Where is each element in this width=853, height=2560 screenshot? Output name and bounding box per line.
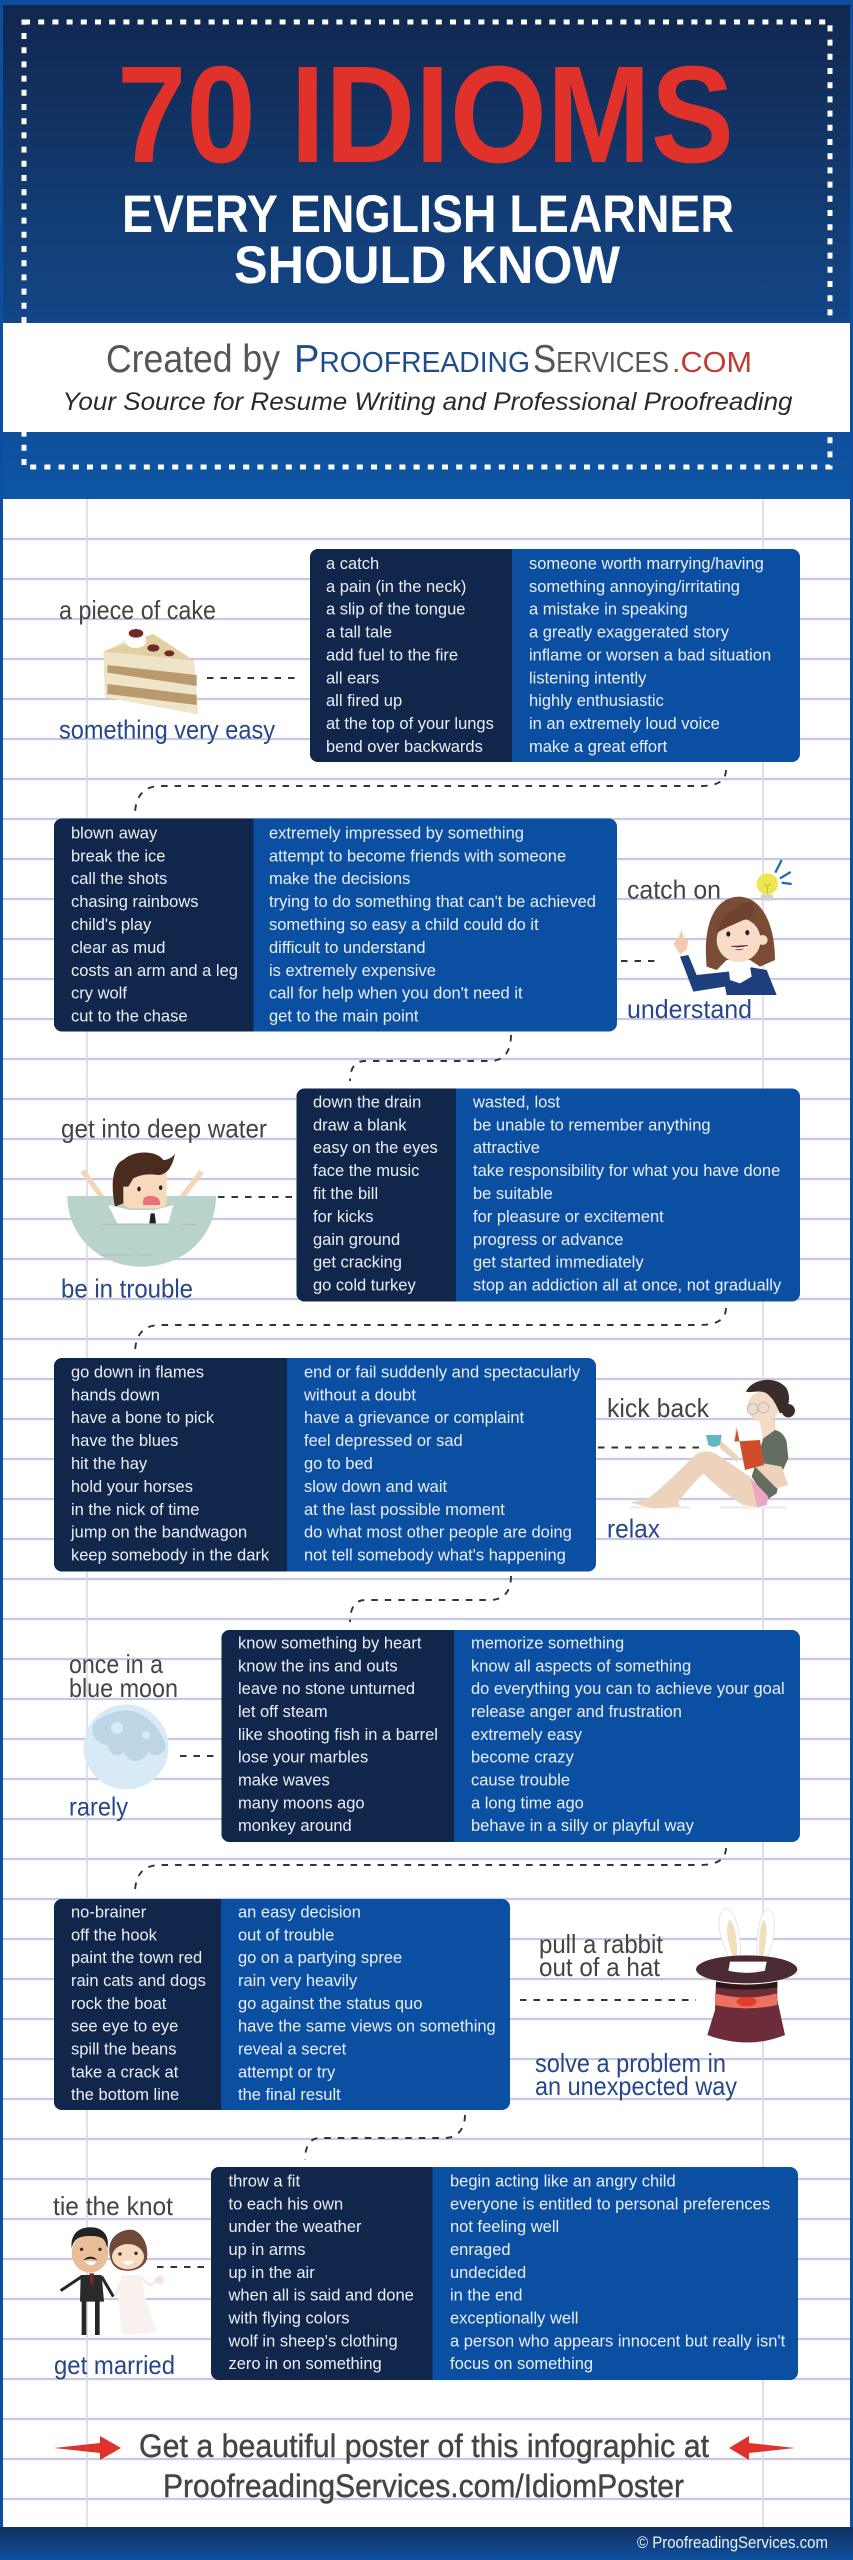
poster call to action: ProofreadingServices.com/IdiomPoster bbox=[163, 2468, 684, 2504]
table 6 bbox=[54, 1899, 510, 2110]
meanings column: memorize something bbox=[471, 1634, 624, 1652]
idioms column: down the drain bbox=[313, 1093, 421, 1111]
meanings column: stop an addiction all at once, not gradually bbox=[473, 1277, 782, 1295]
idioms column: add fuel to the fire bbox=[326, 646, 458, 664]
meanings column: enraged bbox=[450, 2241, 511, 2259]
idioms column: lose your marbles bbox=[238, 1749, 368, 1767]
idioms column: fit the bill bbox=[313, 1185, 378, 1203]
idioms column: costs an arm and a leg bbox=[71, 962, 238, 980]
idioms column: hands down bbox=[71, 1386, 160, 1404]
idioms column: have a bone to pick bbox=[71, 1409, 215, 1427]
idioms column: hold your horses bbox=[71, 1478, 193, 1496]
arrow: right bbox=[729, 2436, 795, 2460]
meanings column: become crazy bbox=[471, 1749, 574, 1767]
idioms column: in the nick of time bbox=[71, 1501, 199, 1519]
section 4 label: kick back: kick back bbox=[607, 1393, 710, 1423]
meanings column: the final result bbox=[238, 2086, 341, 2104]
idioms column: a slip of the tongue bbox=[326, 601, 465, 619]
idioms column: chasing rainbows bbox=[71, 893, 198, 911]
idioms column: all ears bbox=[326, 669, 379, 687]
table 3 bbox=[296, 1088, 800, 1302]
section 1 label: a piece of cake bbox=[59, 595, 275, 744]
idioms column: cut to the chase bbox=[71, 1008, 188, 1026]
meanings column: know all aspects of something bbox=[471, 1657, 691, 1675]
icon: blue moon bbox=[84, 1704, 168, 1790]
meanings column: is extremely expensive bbox=[269, 962, 436, 980]
meanings column: feel depressed or sad bbox=[304, 1432, 463, 1450]
idioms column: rain cats and dogs bbox=[71, 1972, 206, 1990]
idioms column: off the hook bbox=[71, 1926, 158, 1944]
meanings column bbox=[238, 1903, 496, 2104]
connector to table 3 bbox=[218, 1196, 295, 1198]
poster call to action: Get a beautiful poster of this infographic at bbox=[139, 2428, 709, 2464]
meanings column: for pleasure or excitement bbox=[473, 1208, 664, 1226]
idioms column: at the top of your lungs bbox=[326, 715, 494, 733]
meanings column: everyone is entitled to personal preferences bbox=[450, 2195, 770, 2213]
idioms column: get cracking bbox=[313, 1254, 402, 1272]
meanings column: exceptionally well bbox=[450, 2310, 578, 2328]
idioms column: the bottom line bbox=[71, 2086, 179, 2104]
idioms column: gain ground bbox=[313, 1231, 400, 1249]
meanings column: make a great effort bbox=[529, 738, 668, 756]
idioms column: go cold turkey bbox=[313, 1277, 416, 1295]
paper background bbox=[3, 499, 850, 2529]
meanings column: take responsibility for what you have done bbox=[473, 1162, 780, 1180]
meanings column: highly enthusiastic bbox=[529, 692, 664, 710]
meanings column: have the same views on something bbox=[238, 2018, 496, 2036]
section 1 label: a piece of cake: something very easy bbox=[59, 714, 275, 744]
created by logo line: PROOFREADING bbox=[294, 338, 530, 381]
meanings column: someone worth marrying/having bbox=[529, 555, 764, 573]
table 7 bbox=[211, 2167, 798, 2380]
idioms column: clear as mud bbox=[71, 939, 165, 957]
connector to table 6 bbox=[520, 1999, 696, 2001]
meanings column: not tell somebody what's happening bbox=[304, 1547, 566, 1565]
section 3 label: get into deep water: get into deep water bbox=[61, 1114, 267, 1144]
icon: woman with light bulb bbox=[673, 860, 792, 995]
connector: table 4 to table 5 bbox=[350, 1576, 511, 1622]
idioms column: to each his own bbox=[228, 2195, 343, 2213]
idioms column: zero in on something bbox=[228, 2355, 382, 2373]
meanings column bbox=[529, 555, 771, 756]
idioms column: break the ice bbox=[71, 847, 165, 865]
connector: table 1 to table 2 bbox=[135, 770, 726, 815]
meanings column: go against the status quo bbox=[238, 1995, 422, 2013]
idioms column: leave no stone unturned bbox=[238, 1680, 415, 1698]
meanings column: reveal a secret bbox=[238, 2040, 347, 2058]
meanings column bbox=[450, 2172, 786, 2373]
meanings column: difficult to understand bbox=[269, 939, 426, 957]
title: 70 idioms: 70 IDIOMS bbox=[117, 38, 734, 192]
meanings column bbox=[472, 1093, 782, 1295]
idioms column: go down in flames bbox=[71, 1363, 204, 1381]
idioms column bbox=[326, 555, 494, 756]
poster call to action bbox=[54, 2428, 795, 2504]
meanings column: begin acting like an angry child bbox=[450, 2172, 676, 2190]
idioms column: when all is said and done bbox=[228, 2287, 414, 2305]
meanings column bbox=[303, 1363, 581, 1565]
meanings column: extremely impressed by something bbox=[269, 824, 524, 842]
idioms column: for kicks bbox=[313, 1208, 374, 1226]
meanings column: call for help when you don't need it bbox=[269, 985, 523, 1003]
idioms column: paint the town red bbox=[71, 1949, 202, 1967]
idioms column: keep somebody in the dark bbox=[71, 1547, 270, 1565]
idioms column: know something by heart bbox=[238, 1634, 422, 1652]
connector to table 1 bbox=[207, 677, 299, 679]
icon: magician hat with rabbit ears bbox=[696, 1908, 797, 2042]
connector: table 5 to table 6 bbox=[135, 1848, 726, 1893]
section 5 label: once in a blue moon: rarely bbox=[69, 1792, 128, 1822]
idioms column: up in arms bbox=[228, 2241, 306, 2259]
connector to table 4 bbox=[598, 1446, 704, 1448]
section 5 label: once in a blue moon bbox=[69, 1649, 178, 1822]
section 7 label: tie the knot: get married bbox=[54, 2350, 175, 2380]
section 6 label: pull a rabbit out of a hat: out of a hat bbox=[539, 1952, 661, 1982]
meanings column: trying to do something that can't be achieved bbox=[269, 893, 596, 911]
idioms column: a catch bbox=[326, 555, 379, 573]
idioms column: take a crack at bbox=[71, 2063, 179, 2081]
meanings column: do everything you can to achieve your goal bbox=[471, 1680, 785, 1698]
connector: table 2 to table 3 bbox=[350, 1035, 511, 1081]
meanings column: extremely easy bbox=[471, 1726, 583, 1744]
meanings column: make the decisions bbox=[269, 870, 410, 888]
idioms column: call the shots bbox=[71, 870, 167, 888]
meanings column: at the last possible moment bbox=[304, 1501, 505, 1519]
idioms column: face the music bbox=[313, 1162, 419, 1180]
meanings column: out of trouble bbox=[238, 1926, 334, 1944]
created by logo line: SERVICES bbox=[533, 338, 669, 381]
meanings column: focus on something bbox=[450, 2355, 593, 2373]
idioms column: draw a blank bbox=[313, 1116, 407, 1134]
icon: bride and groom bbox=[61, 2227, 164, 2335]
meanings column: a mistake in speaking bbox=[529, 601, 688, 619]
idioms column bbox=[228, 2172, 414, 2373]
meanings column: in an extremely loud voice bbox=[529, 715, 720, 733]
idioms column: spill the beans bbox=[71, 2040, 176, 2058]
meanings column: attractive bbox=[473, 1139, 540, 1157]
section 3 label: get into deep water: be in trouble bbox=[61, 1274, 193, 1304]
meanings column: behave in a silly or playful way bbox=[471, 1817, 695, 1835]
section 5 label: once in a blue moon: once in a bbox=[69, 1649, 163, 1679]
idioms column: bend over backwards bbox=[326, 738, 483, 756]
idioms column bbox=[238, 1634, 438, 1835]
section 4 label: kick back: relax bbox=[607, 1514, 660, 1544]
meanings column: do what most other people are doing bbox=[304, 1524, 572, 1542]
section 6 label: pull a rabbit out of a hat bbox=[535, 1908, 797, 2101]
idioms column: make waves bbox=[238, 1772, 330, 1790]
idioms column bbox=[71, 1903, 206, 2104]
idioms column: wolf in sheep's clothing bbox=[228, 2332, 398, 2350]
meanings column: a person who appears innocent but really isn't bbox=[450, 2332, 786, 2350]
section 4 label: kick back bbox=[607, 1380, 795, 1544]
meanings column: get started immediately bbox=[473, 1254, 644, 1272]
section 7 label: tie the knot: tie the knot bbox=[53, 2191, 174, 2221]
idioms column bbox=[70, 1363, 270, 1565]
meanings column: release anger and frustration bbox=[471, 1703, 682, 1721]
connector: table 6 to table 7 bbox=[305, 2115, 465, 2160]
meanings column: end or fail suddenly and spectacularly bbox=[304, 1363, 581, 1381]
meanings column: wasted, lost bbox=[472, 1093, 561, 1111]
idioms column: no-brainer bbox=[71, 1903, 147, 1921]
idioms column: see eye to eye bbox=[71, 2018, 178, 2036]
table 5 bbox=[222, 1630, 800, 1842]
meanings column: a greatly exaggerated story bbox=[529, 624, 730, 642]
idioms column: blown away bbox=[71, 824, 158, 842]
idioms column: easy on the eyes bbox=[313, 1139, 438, 1157]
footer bar: © ProofreadingServices.com bbox=[637, 2534, 828, 2552]
meanings column: attempt to become friends with someone bbox=[269, 847, 566, 865]
icon: man in deep water bbox=[67, 1152, 216, 1267]
section 6 label: pull a rabbit out of a hat: pull a rabbit bbox=[539, 1929, 664, 1959]
meanings column bbox=[269, 824, 596, 1026]
idioms column: have the blues bbox=[71, 1432, 178, 1450]
meanings column: progress or advance bbox=[473, 1231, 623, 1249]
idioms column bbox=[71, 824, 238, 1026]
subtitle bbox=[122, 185, 734, 295]
meanings column: go on a partying spree bbox=[238, 1949, 402, 1967]
header banner bbox=[3, 5, 850, 499]
idioms column: a pain (in the neck) bbox=[326, 578, 466, 596]
meanings column: undecided bbox=[450, 2264, 526, 2282]
icon: woman relaxing with book bbox=[630, 1380, 795, 1509]
meanings column: rain very heavily bbox=[238, 1972, 358, 1990]
idioms column: let off steam bbox=[238, 1703, 328, 1721]
idioms column: know the ins and outs bbox=[238, 1657, 398, 1675]
idioms column: a tall tale bbox=[326, 624, 392, 642]
meanings column bbox=[471, 1634, 785, 1835]
meanings column: something so easy a child could do it bbox=[269, 916, 539, 934]
meanings column: without a doubt bbox=[303, 1386, 416, 1404]
meanings column: have a grievance or complaint bbox=[304, 1409, 525, 1427]
tagline: Your Source for Resume Writing and Professional Proofreading bbox=[62, 388, 793, 416]
meanings column: attempt or try bbox=[238, 2063, 336, 2081]
table 4 bbox=[54, 1358, 596, 1572]
section 1 label: a piece of cake: a piece of cake bbox=[59, 595, 216, 625]
created by logo line bbox=[106, 338, 752, 381]
section 2 label: catch on: understand bbox=[627, 994, 752, 1024]
idioms column: with flying colors bbox=[228, 2310, 350, 2328]
footer bar bbox=[0, 2527, 853, 2560]
idioms column: rock the boat bbox=[71, 1995, 167, 2013]
meanings column: inflame or worsen a bad situation bbox=[529, 646, 771, 664]
section 7 label: tie the knot bbox=[53, 2191, 175, 2380]
idioms column: like shooting fish in a barrel bbox=[238, 1726, 438, 1744]
section 5 label: once in a blue moon: blue moon bbox=[69, 1673, 178, 1703]
meanings column: in the end bbox=[450, 2287, 522, 2305]
meanings column: go to bed bbox=[304, 1455, 373, 1473]
icon: cake slice bbox=[103, 629, 198, 714]
connector to table 2 bbox=[621, 960, 657, 962]
meanings column: cause trouble bbox=[471, 1772, 570, 1790]
connector to table 5 bbox=[180, 1755, 215, 1757]
meanings column: listening intently bbox=[529, 669, 647, 687]
idioms column: jump on the bandwagon bbox=[70, 1524, 247, 1542]
meanings column: an easy decision bbox=[238, 1903, 361, 1921]
created by logo line: Created by bbox=[106, 338, 280, 381]
idioms column: up in the air bbox=[228, 2264, 315, 2282]
created by logo line: .COM bbox=[672, 347, 752, 379]
meanings column: be unable to remember anything bbox=[473, 1116, 711, 1134]
section 3 label: get into deep water bbox=[61, 1114, 267, 1304]
connector: table 3 to table 4 bbox=[135, 1308, 726, 1354]
meanings column: get to the main point bbox=[269, 1008, 419, 1026]
idioms column: cry wolf bbox=[71, 985, 127, 1003]
section 2 label: catch on: catch on bbox=[627, 874, 721, 904]
idioms column: many moons ago bbox=[238, 1794, 365, 1812]
idioms column: monkey around bbox=[238, 1817, 352, 1835]
subtitle: SHOULD KNOW bbox=[234, 236, 620, 295]
idioms column: all fired up bbox=[326, 692, 402, 710]
section 6 label: pull a rabbit out of a hat: solve a problem in bbox=[535, 2048, 726, 2078]
section 2 label: catch on bbox=[627, 860, 792, 1024]
arrow: left bbox=[54, 2436, 121, 2460]
idioms column: child's play bbox=[71, 916, 152, 934]
meanings column: something annoying/irritating bbox=[529, 578, 740, 596]
section 6 label: pull a rabbit out of a hat: an unexpected way bbox=[535, 2071, 737, 2101]
connector to table 7 bbox=[157, 2266, 207, 2268]
meanings column: slow down and wait bbox=[304, 1478, 447, 1496]
idioms column: throw a fit bbox=[228, 2172, 300, 2190]
idioms column: hit the hay bbox=[71, 1455, 148, 1473]
table 1 bbox=[310, 549, 800, 762]
idioms column: under the weather bbox=[228, 2218, 362, 2236]
table 2 bbox=[54, 818, 617, 1032]
subtitle: EVERY ENGLISH LEARNER bbox=[122, 185, 734, 244]
meanings column: a long time ago bbox=[471, 1794, 584, 1812]
meanings column: be suitable bbox=[473, 1185, 553, 1203]
meanings column: not feeling well bbox=[450, 2218, 559, 2236]
credit band bbox=[3, 323, 850, 432]
idioms column bbox=[313, 1093, 438, 1295]
